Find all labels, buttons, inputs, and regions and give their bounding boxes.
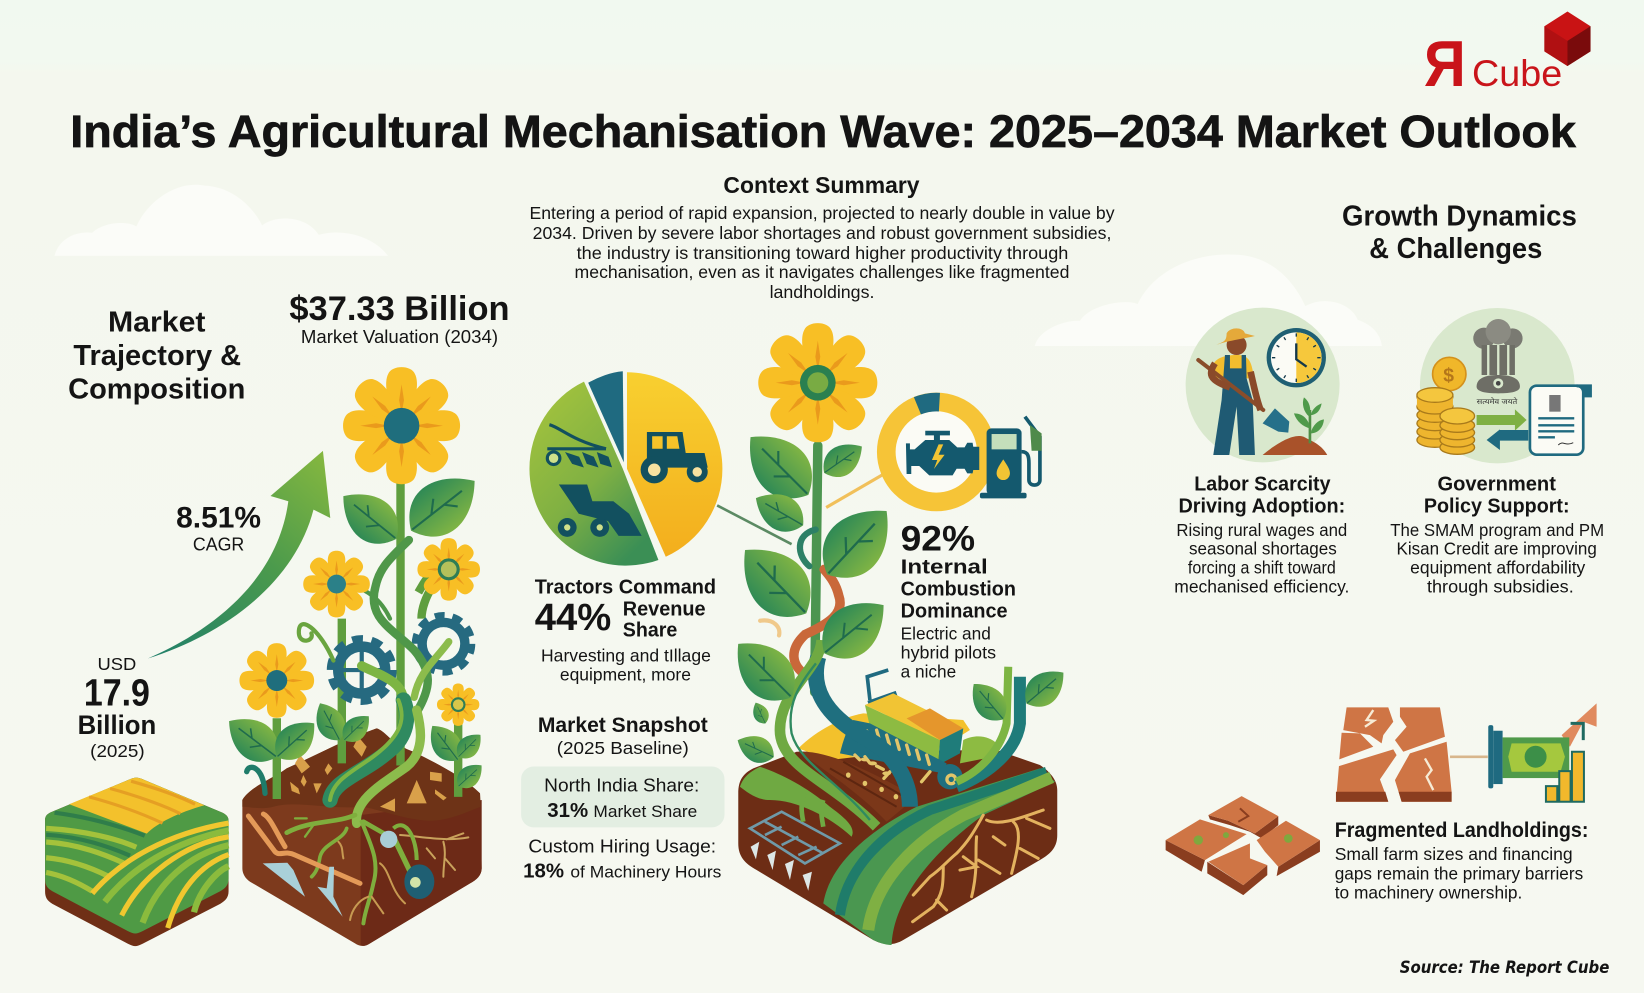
labor scarcity text [1174, 474, 1349, 596]
custom hiring stat [523, 835, 721, 883]
cloud: left [55, 185, 388, 256]
north india card: Market Share [593, 802, 697, 821]
combustion stat text: Dominance [901, 601, 1008, 623]
panel: growth dynamics and challenges [1166, 199, 1604, 903]
labor scarcity text: Labor Scarcity [1194, 474, 1331, 496]
logo cube [1544, 12, 1591, 66]
twisting vines [299, 540, 449, 713]
stems [277, 482, 458, 799]
tan roots [400, 833, 468, 877]
context body [529, 203, 1115, 302]
custom hiring stat: Custom Hiring Usage: [528, 835, 716, 856]
context body: Entering a period of rapid expansion, projected to nearly double in value by [529, 203, 1115, 223]
green roots [287, 815, 405, 923]
tractor stat text: Revenue [623, 599, 706, 621]
snapshot heading: Market Snapshot [538, 714, 708, 737]
connector line [1450, 756, 1488, 758]
tendril [247, 767, 265, 793]
illustration: striped field block [45, 778, 229, 946]
labor scarcity text: Driving Adoption: [1178, 496, 1345, 518]
icon: harvester [558, 484, 642, 537]
icon: tractor [641, 432, 708, 483]
stat: 2034 valuation [289, 290, 510, 347]
soil block [242, 728, 482, 946]
panel: internal combustion share [826, 402, 1042, 681]
custom hiring stat: of Machinery Hours [570, 863, 721, 882]
wheel [380, 825, 434, 899]
logo: RCube [1424, 12, 1591, 100]
harrow tool [750, 793, 840, 891]
yellow roots [913, 810, 1050, 922]
fragmented landholdings text: Small farm sizes and financing [1335, 844, 1573, 864]
context body: landholdings. [770, 282, 874, 302]
government policy text: The SMAM program and PM [1390, 520, 1604, 540]
panel: market snapshot [521, 714, 724, 883]
section heading: market trajectory: Market [108, 305, 206, 337]
panel: context summary [529, 172, 1115, 302]
stat: CAGR: CAGR [193, 534, 244, 555]
roots, vine base and tools [247, 700, 468, 923]
emblem motto: सत्यमेव जयते [1477, 397, 1518, 406]
tractor stat text: equipment, more [560, 665, 691, 685]
lower vines [780, 640, 1020, 827]
flowers [239, 367, 480, 726]
icon: fragmented soil tiles [1166, 796, 1320, 895]
combustion stat text: a niche [901, 661, 956, 681]
tractor stat text: Tractors Command [535, 576, 716, 598]
leaves [217, 460, 491, 794]
pie chart [529, 371, 722, 566]
planter machine [840, 670, 963, 789]
icon: engine [906, 431, 979, 475]
government policy text: equipment affordability [1410, 558, 1586, 578]
fragmented landholdings text: Fragmented Landholdings: [1335, 819, 1588, 842]
snapshot heading: (2025 Baseline) [557, 738, 689, 758]
labor scarcity text: mechanised efficiency. [1174, 576, 1349, 596]
coin stacks [1417, 388, 1475, 454]
exchange arrows [1477, 409, 1527, 431]
government policy text: Policy Support: [1424, 496, 1570, 518]
logo word Cube: Cube [1472, 53, 1562, 94]
combustion stat text: hybrid pilots [901, 643, 996, 663]
section heading: growth dynamics [1342, 199, 1577, 264]
national emblem [1473, 319, 1523, 393]
tractor stat text: Harvesting and tIllage [541, 646, 711, 666]
labor scarcity text: Rising rural wages and [1176, 520, 1347, 540]
coin with dollar sign [1433, 357, 1466, 391]
labor scarcity text: seasonal shortages [1189, 539, 1337, 559]
section heading: market trajectory: Trajectory & [73, 339, 241, 371]
north india card [521, 767, 724, 827]
north india card: North India Share: [544, 775, 699, 796]
fragmented landholdings text: gaps remain the primary barriers [1335, 864, 1584, 884]
panel: market trajectory and composition [45, 290, 510, 946]
combustion stat text: Internal [901, 557, 988, 579]
section heading: growth dynamics: Growth Dynamics [1342, 199, 1577, 231]
combustion stat text [901, 518, 1016, 681]
stems and vines [760, 446, 840, 692]
stat: 2025 value: Billion [78, 709, 156, 740]
government policy text: through subsidies. [1427, 576, 1574, 596]
source note: Source: The Report Cube [1400, 957, 1609, 977]
government policy text: Government [1437, 474, 1556, 496]
section heading: growth dynamics: & Challenges [1369, 232, 1542, 264]
fragmented landholdings text [1335, 819, 1588, 903]
context body: mechanisation, even as it navigates challenges like fragmented [575, 262, 1069, 282]
fragmented landholdings text: to machinery ownership. [1335, 883, 1522, 903]
icon: farmer with clock [1186, 308, 1340, 462]
section heading: market trajectory [68, 305, 245, 404]
plough [248, 814, 360, 917]
policy document [1530, 384, 1592, 455]
combustion stat text: 92% [901, 518, 975, 559]
gears [332, 617, 471, 700]
thick vine base [330, 700, 420, 823]
donut chart [886, 402, 986, 502]
labor scarcity text: forcing a shift toward [1188, 558, 1336, 578]
tractor stat text [535, 576, 716, 685]
connector line [826, 474, 884, 508]
government policy text [1390, 474, 1604, 596]
icon: government emblem, coins and document [1417, 308, 1592, 463]
icon: plough [547, 425, 611, 467]
custom hiring stat: 18% [523, 861, 564, 883]
green band [823, 768, 1055, 945]
combustion stat text: Combustion [901, 579, 1016, 601]
icon: money and rising bars [1488, 703, 1597, 802]
stat: 2034 valuation: Market Valuation (2034) [301, 326, 498, 347]
icon: cracked land [1336, 707, 1452, 802]
panel: tractor revenue share [529, 371, 792, 685]
section heading: market trajectory: Composition [68, 372, 245, 404]
snapshot heading [538, 714, 708, 758]
cloud: right [1035, 254, 1382, 346]
context heading: Context Summary [723, 172, 920, 198]
combustion stat text: Electric and [901, 624, 991, 644]
tractor stat text: Share [623, 619, 677, 641]
stat: CAGR: 8.51% [176, 501, 261, 534]
tractor stat text: 44% [535, 596, 611, 638]
coin with dollar sign: $ [1443, 366, 1454, 387]
context body: the industry is transitioning toward higher productivity through [577, 243, 1068, 263]
farm block [738, 670, 1057, 945]
stat: 2025 value: 17.9 [84, 672, 150, 714]
north india card: 31% [547, 800, 588, 822]
stat: 2025 value [78, 654, 156, 761]
government policy text: Kisan Credit are improving [1397, 539, 1597, 559]
icon: fuel pump [980, 417, 1042, 498]
stat: 2034 valuation: $37.33 Billion [289, 290, 510, 328]
logo mirrored R: R [1424, 27, 1466, 100]
growth arrow [148, 451, 330, 659]
leaves [721, 418, 1073, 769]
main flower [758, 323, 877, 442]
context body: 2034. Driven by severe labor shortages and robust government subsidies, [533, 223, 1111, 243]
illustration: central plant and farm block [721, 323, 1073, 945]
illustration: flowering plant growing from soil block [217, 367, 491, 946]
stat: 2025 value: USD [98, 654, 136, 674]
stat: CAGR [176, 501, 261, 555]
stat: 2025 value: (2025) [90, 741, 145, 761]
connector line [717, 505, 792, 544]
title: India’s Agricultural Mechanisation Wave: 2025–2034 Market Outlook [70, 106, 1577, 157]
